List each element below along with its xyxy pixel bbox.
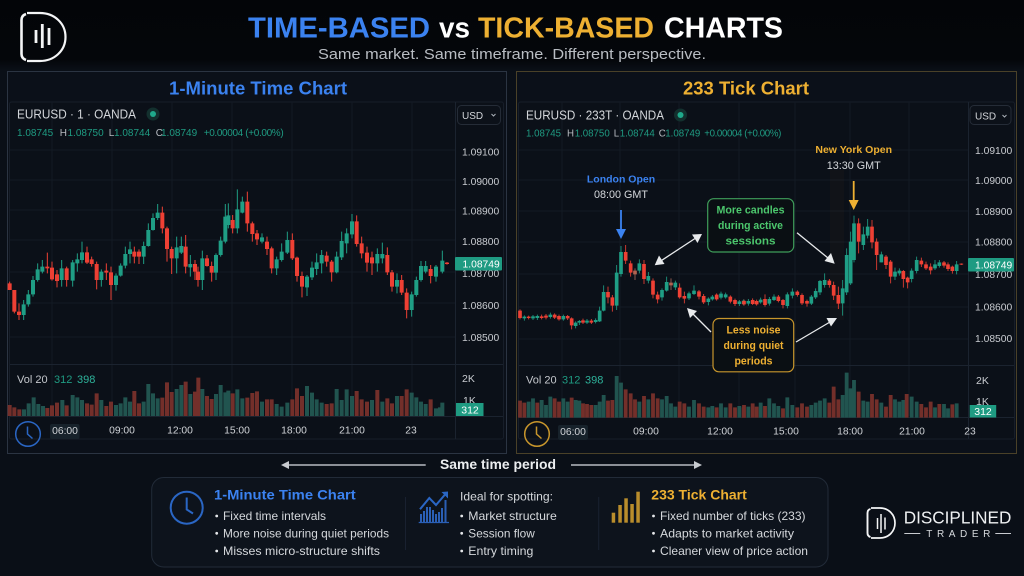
text block: 233 tick chart: Adapts to market activity <box>660 526 794 540</box>
price axis: 1.08700 <box>462 269 499 280</box>
ohlc values: 1.08749 <box>161 128 198 139</box>
arrows: callout pointers <box>655 233 837 342</box>
panel: 233 tick chart <box>516 72 1016 454</box>
ohlc values: 1.08745 <box>526 128 561 140</box>
text block: ideal for spotting: Session flow <box>468 526 535 540</box>
icon: chart with rising arrow <box>419 492 449 522</box>
annotation: new york open: New York Open <box>815 144 892 156</box>
volume axis: 2K <box>976 375 989 387</box>
price axis: 1.08500 <box>975 334 1012 345</box>
ohlc values <box>526 128 781 140</box>
ohlc values: 1.08744 <box>114 128 151 139</box>
ohlc values: 1.08749 <box>665 128 700 140</box>
text block: 233 tick chart: Cleaner view of price action <box>660 544 808 558</box>
text block: 233 tick chart: Fixed number of ticks (233) <box>660 509 806 523</box>
annotation: london open: 08:00 GMT <box>594 189 648 201</box>
volume label: 312 <box>562 374 580 386</box>
ohlc values <box>17 128 284 139</box>
price axis <box>975 146 1012 345</box>
price axis: 1.08800 <box>462 237 499 248</box>
price tag <box>968 258 1014 272</box>
text block: 1-minute time chart: 1-Minute Time Chart <box>214 486 356 502</box>
volume axis: 312 <box>974 406 992 418</box>
ohlc values: C <box>156 128 163 139</box>
price axis: 1.08500 <box>462 333 499 344</box>
icon: clock blue small <box>16 422 40 446</box>
candlesticks: tick chart part one <box>520 245 744 329</box>
time axis: 15:00 <box>773 426 799 438</box>
price axis: 1.09000 <box>975 176 1012 187</box>
time axis: 18:00 <box>837 426 863 438</box>
volume axis: 312 <box>461 404 479 416</box>
ohlc values: H <box>60 128 67 139</box>
title: TICK-BASED <box>478 12 654 44</box>
time axis: 09:00 <box>633 426 659 438</box>
volume label: Vol 20 <box>17 374 48 386</box>
callout: more candles: sessions <box>726 236 776 248</box>
arrow: same time period left <box>281 461 426 469</box>
arrow: london open <box>616 210 626 239</box>
time axis: 21:00 <box>339 426 365 436</box>
text block: ideal for spotting <box>460 489 557 558</box>
text block: 1-minute time chart: More noise during quiet periods <box>223 526 389 540</box>
callout: less noise: during quiet <box>724 340 784 352</box>
volume axis <box>456 373 484 416</box>
text block: 233 tick chart: 233 Tick Chart <box>651 486 747 502</box>
time axis: 21:00 <box>899 426 925 438</box>
ohlc values: 1.08750 <box>575 128 610 140</box>
price axis: 1.08900 <box>462 206 499 218</box>
text block: ideal for spotting: Market structure <box>468 509 557 523</box>
title <box>248 12 783 44</box>
volume axis: 2K <box>462 373 475 385</box>
annotation: new york open: 13:30 GMT <box>827 160 881 172</box>
ohlc values: H <box>567 128 574 140</box>
icon: tick bars <box>612 492 640 523</box>
panel heading: 1-minute time chart: 1-Minute Time Chart <box>169 78 347 98</box>
volume label: 398 <box>585 374 603 386</box>
volume axis <box>970 375 996 418</box>
price tag: 1.08749 <box>462 260 500 271</box>
subtitle: Same market. Same timeframe. Different perspective. <box>318 46 706 63</box>
volume bars: tick chart part two <box>744 373 957 418</box>
symbol header: EURUSD · 233T · OANDA <box>526 108 665 122</box>
icon: clock large <box>171 492 203 524</box>
volume axis: 1K <box>976 396 989 408</box>
ohlc values: C <box>659 128 666 140</box>
price axis: 1.08600 <box>462 301 499 312</box>
volume label <box>526 374 603 386</box>
title: vs <box>439 12 470 44</box>
ohlc values: L <box>614 128 620 140</box>
label: same time period: Same time period <box>440 456 556 472</box>
ohlc values: +0.00004 (+0.00%) <box>204 128 284 139</box>
price axis <box>462 148 499 344</box>
text block: ideal for spotting: Entry timing <box>468 544 533 558</box>
currency selector: USD <box>975 112 996 122</box>
panel heading: 233 tick chart: 233 Tick Chart <box>683 78 809 98</box>
ohlc values: 1.08750 <box>68 128 104 139</box>
logo wordmark: DISCIPLINED <box>904 508 1011 528</box>
time axis: 23 <box>405 426 417 436</box>
logo: disciplined trader <box>868 508 1011 540</box>
ohlc values: 1.08744 <box>620 128 655 140</box>
time axis: 12:00 <box>167 426 193 436</box>
callout: less noise <box>713 318 794 372</box>
time axis: 12:00 <box>707 426 733 438</box>
price axis: 1.09100 <box>975 146 1012 157</box>
price axis: 1.08800 <box>975 238 1012 248</box>
price axis: 1.08900 <box>975 207 1012 218</box>
text block: 233 tick chart <box>651 486 808 558</box>
time axis <box>558 425 976 440</box>
logo: top left <box>22 13 66 61</box>
volume axis: 1K <box>463 395 476 407</box>
time axis: 18:00 <box>281 426 307 436</box>
candlesticks: tick chart part two <box>744 216 961 316</box>
text block: 1-minute time chart <box>214 486 389 558</box>
price axis: 1.09000 <box>462 177 499 188</box>
candlesticks: time chart <box>10 189 447 320</box>
currency selector: USD <box>462 111 483 122</box>
icon: clock gold small <box>525 422 549 446</box>
logo mark <box>868 508 895 538</box>
volume bars: tick chart part one <box>520 376 744 418</box>
time axis: 15:00 <box>224 426 250 436</box>
time axis <box>50 424 417 439</box>
price axis: 1.09100 <box>462 148 499 158</box>
text block: 1-minute time chart: Fixed time intervals <box>223 509 326 523</box>
callout: less noise: Less noise <box>726 324 780 336</box>
price axis: 1.08700 <box>975 270 1012 281</box>
panel: 1-minute time chart <box>8 72 506 454</box>
arrow: new york open <box>849 181 859 210</box>
time axis: 06:00 <box>560 427 586 438</box>
ohlc values: L <box>109 128 115 139</box>
panel: comparison summary <box>152 478 828 567</box>
callout: more candles: More candles <box>716 204 784 216</box>
currency selector <box>458 106 500 124</box>
volume label: 312 <box>54 374 72 386</box>
annotation: london open: London Open <box>587 174 655 186</box>
volume bars: time chart <box>10 378 442 416</box>
volume label <box>17 374 95 386</box>
time axis: 23 <box>964 426 976 438</box>
time axis: 09:00 <box>109 426 135 436</box>
callout: less noise: periods <box>734 356 772 368</box>
symbol header: EURUSD · 1 · OANDA <box>17 108 137 122</box>
price tag: 1.08749 <box>975 261 1012 272</box>
time axis: 06:00 <box>52 426 78 437</box>
volume label: 398 <box>77 374 95 386</box>
price axis: 1.08600 <box>975 302 1012 314</box>
callout: more candles <box>708 199 794 252</box>
currency selector <box>970 106 1011 124</box>
annotation: london open <box>587 174 655 201</box>
text block: ideal for spotting: Ideal for spotting: <box>460 489 553 503</box>
annotation: new york open <box>815 144 892 172</box>
arrow: same time period right <box>571 461 702 469</box>
ohlc values: +0.00004 (+0.00%) <box>704 128 781 140</box>
price tag <box>455 257 502 271</box>
logo tagline: TRADER <box>926 529 990 540</box>
title: CHARTS <box>664 12 783 44</box>
title: TIME-BASED <box>248 12 430 44</box>
text block: 1-minute time chart: Misses micro-structure shifts <box>223 544 380 558</box>
ohlc values: 1.08745 <box>17 128 54 139</box>
volume label: Vol 20 <box>526 374 557 386</box>
callout: more candles: during active <box>718 220 783 232</box>
